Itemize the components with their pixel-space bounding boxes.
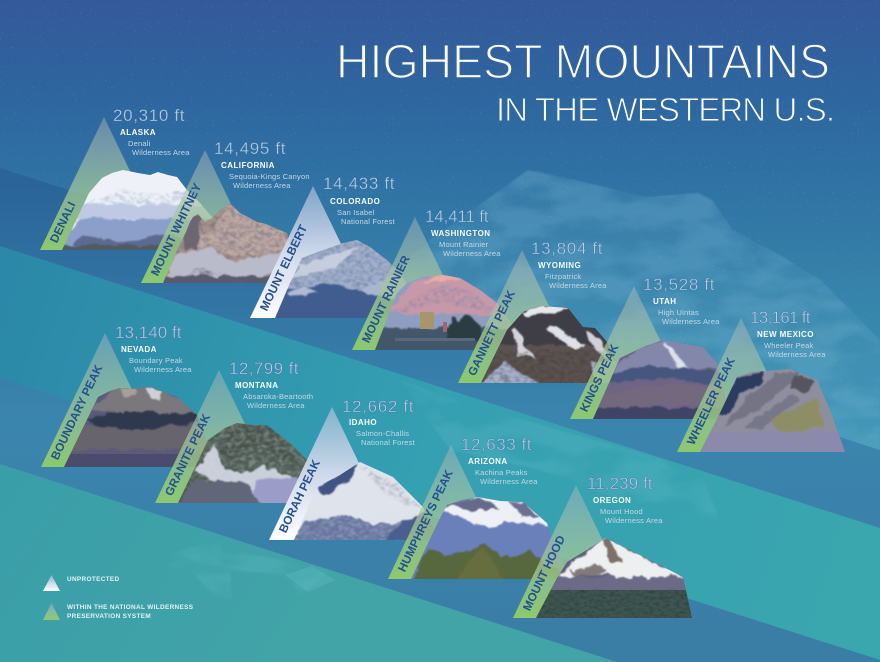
elevation: 14,495 ft bbox=[214, 139, 286, 158]
name label: MOUNT RAINIER bbox=[359, 253, 413, 345]
protected area bbox=[545, 272, 607, 290]
peak triangle bbox=[458, 250, 586, 383]
mountain: Borah Peak bbox=[269, 400, 434, 540]
peak triangle bbox=[388, 445, 515, 579]
protected area bbox=[337, 208, 396, 226]
protected area: Denali bbox=[128, 139, 151, 148]
protected area: Salmon-Challis bbox=[356, 429, 409, 438]
name label: DENALI bbox=[47, 199, 79, 245]
mountain: Gannett Peak bbox=[458, 242, 617, 383]
photo: Mount Whitney bbox=[163, 203, 290, 283]
protected area: Wilderness Area bbox=[662, 317, 720, 326]
name label: HUMPHREYS PEAK bbox=[395, 467, 456, 574]
state: MONTANA bbox=[235, 381, 278, 390]
protected area bbox=[243, 392, 313, 410]
protected area bbox=[229, 172, 310, 190]
title bbox=[336, 35, 835, 128]
legend bbox=[43, 575, 194, 620]
protected area: Mount Hood bbox=[600, 507, 643, 516]
name label: WHEELER PEAK bbox=[684, 355, 738, 447]
name label: KINGS PEAK bbox=[577, 341, 622, 414]
peak triangle bbox=[40, 117, 168, 250]
protected area: Wilderness Area bbox=[247, 401, 305, 410]
state: COLORADO bbox=[330, 197, 380, 206]
protected area bbox=[439, 240, 501, 258]
title: HIGHEST MOUNTAINS bbox=[336, 35, 830, 89]
protected area: Wilderness Area bbox=[443, 249, 501, 258]
mountain: Mount Hood bbox=[513, 474, 700, 622]
state: IDAHO bbox=[349, 418, 377, 427]
protected area: Fitzpatrick bbox=[545, 272, 581, 281]
peak triangle bbox=[513, 485, 640, 618]
mountain: Mount Elbert bbox=[250, 177, 407, 318]
mountain: Mount Rainier bbox=[352, 210, 512, 350]
name label: BORAH PEAK bbox=[276, 457, 323, 535]
protected area: San Isabel bbox=[337, 208, 375, 217]
name label: MOUNT ELBERT bbox=[257, 222, 310, 313]
elevation: 14,433 ft bbox=[323, 174, 395, 193]
protected area: Wheeler Peak bbox=[764, 341, 814, 350]
protected area: Kachina Peaks bbox=[475, 468, 528, 477]
peak triangle bbox=[570, 286, 698, 419]
name label: MOUNT HOOD bbox=[520, 533, 568, 613]
protected area: National Forest bbox=[361, 438, 416, 447]
mountain: Humphreys Peak bbox=[388, 438, 564, 579]
elevation: 12,799 ft bbox=[229, 359, 299, 378]
protected area bbox=[356, 429, 416, 447]
protected area: Wilderness Area bbox=[134, 365, 192, 374]
protected area: Mount Rainier bbox=[439, 240, 489, 249]
legend text: wilderness: WITHIN THE NATIONAL WILDERNESS bbox=[67, 604, 194, 611]
photo: Gannett Peak bbox=[481, 306, 617, 383]
name label: GANNETT PEAK bbox=[465, 288, 518, 378]
peak triangle bbox=[155, 370, 283, 503]
peak triangle bbox=[269, 407, 396, 540]
mountain: Wheeler Peak bbox=[677, 308, 850, 457]
elevation: 11,239 ft bbox=[587, 474, 653, 493]
peak triangle bbox=[352, 217, 479, 350]
photo: Mount Hood bbox=[536, 538, 692, 618]
state: ALASKA bbox=[120, 128, 156, 137]
state: UTAH bbox=[653, 297, 676, 306]
elevation: 14,411 ft bbox=[425, 207, 489, 226]
protected area: Wilderness Area bbox=[233, 181, 291, 190]
protected area: Wilderness Area bbox=[768, 350, 826, 359]
peak triangle bbox=[141, 150, 269, 283]
protected area bbox=[128, 139, 190, 157]
protected area: Wilderness Area bbox=[605, 516, 663, 525]
protected area bbox=[764, 341, 826, 359]
legend text: wilderness: PRESERVATION SYSTEM bbox=[67, 613, 151, 620]
peak triangle bbox=[250, 186, 377, 318]
protected area: Boundary Peak bbox=[129, 356, 183, 365]
photo: Boundary Peak bbox=[64, 387, 206, 467]
elevation: 12,633 ft bbox=[461, 435, 532, 454]
elevation: 12,662 ft bbox=[342, 397, 414, 416]
elevation: 13,161 ft bbox=[750, 308, 811, 327]
elevation: 20,310 ft bbox=[113, 106, 185, 125]
protected area: Wilderness Area bbox=[549, 281, 607, 290]
state: CALIFORNIA bbox=[221, 161, 275, 170]
peak triangle bbox=[677, 318, 805, 452]
photo: Wheeler Peak bbox=[700, 369, 845, 452]
protected area: National Forest bbox=[341, 217, 396, 226]
photo: Humphreys Peak bbox=[411, 497, 564, 579]
protected area: Sequoia-Kings Canyon bbox=[229, 172, 310, 181]
protected area: Wilderness Area bbox=[480, 477, 538, 486]
protected area bbox=[658, 308, 720, 326]
elevation: 13,140 ft bbox=[115, 323, 182, 342]
peak triangle bbox=[41, 333, 169, 467]
protected area: Wilderness Area bbox=[132, 148, 190, 157]
photo: Borah Peak bbox=[294, 462, 434, 540]
photo: Mount Rainier bbox=[375, 275, 512, 350]
state: WASHINGTON bbox=[431, 229, 490, 238]
state: NEVADA bbox=[121, 345, 157, 354]
state: ARIZONA bbox=[468, 457, 508, 466]
protected area bbox=[129, 356, 192, 374]
photo: Mount Elbert bbox=[275, 240, 407, 318]
state: OREGON bbox=[593, 496, 631, 505]
name label: MOUNT WHITNEY bbox=[148, 181, 204, 278]
mountain: Mount Whitney bbox=[141, 139, 310, 290]
photo: Denali bbox=[62, 170, 212, 250]
elevation: 13,528 ft bbox=[643, 275, 715, 294]
state: WYOMING bbox=[538, 261, 581, 270]
mountain: Granite Peak bbox=[155, 362, 313, 503]
protected area: Absaroka-Beartooth bbox=[243, 392, 313, 401]
legend text: unprotected: UNPROTECTED bbox=[67, 576, 120, 583]
protected area bbox=[475, 468, 538, 486]
photo: Granite Peak bbox=[178, 423, 308, 503]
icon: wilderness triangle bbox=[43, 603, 60, 620]
mountain: Kings Peak bbox=[570, 278, 726, 419]
legend text: wilderness bbox=[67, 604, 194, 620]
title: IN THE WESTERN U.S. bbox=[496, 91, 835, 128]
name label: BOUNDARY PEAK bbox=[48, 362, 106, 462]
photo: Kings Peak bbox=[593, 340, 726, 419]
icon: unprotected triangle bbox=[43, 575, 60, 591]
mountain: Denali bbox=[40, 106, 220, 255]
state: NEW MEXICO bbox=[757, 330, 814, 339]
elevation: 13,804 ft bbox=[531, 239, 603, 258]
mountain: Boundary Peak bbox=[41, 326, 206, 467]
name label: GRANITE PEAK bbox=[162, 411, 213, 498]
protected area bbox=[600, 507, 663, 525]
protected area: High Uintas bbox=[658, 308, 699, 317]
